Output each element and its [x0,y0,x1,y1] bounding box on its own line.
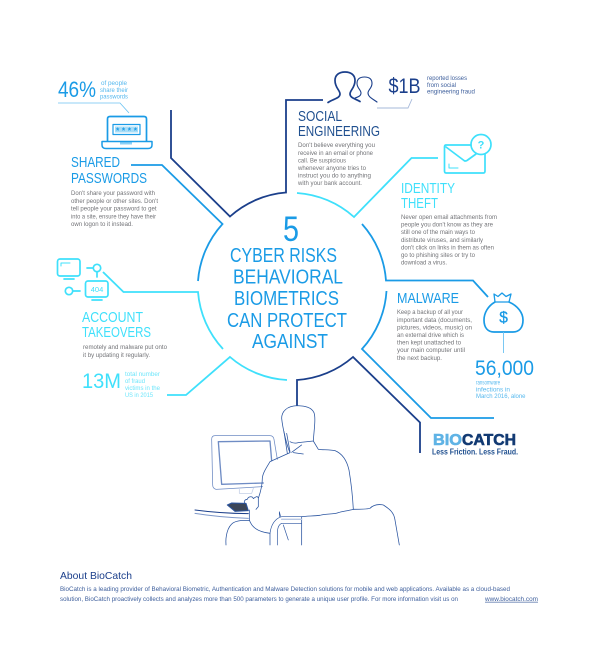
body text: the next backup. [397,355,442,362]
stat: 56,000: March 2016, alone [476,393,526,400]
about text: www.biocatch.com [484,596,538,603]
central title: CYBER RISKS [230,245,337,267]
connector: account takeovers frame [103,272,223,349]
icon: monitors and nodes: 404 [91,285,103,294]
body text: other people or other sites. Don't [71,198,158,205]
heading: about: About BioCatch [60,570,132,582]
logo wordmark: BIO [433,432,462,449]
central title [227,210,347,353]
panel: account takeovers [58,259,167,399]
stat: 46 percent [58,77,129,102]
body text [397,309,472,362]
icon: envelope with question mark: ? [478,140,485,152]
body text: download a virus. [401,260,447,266]
body text: Keep a backup of all your [397,309,464,316]
central title: BIOMETRICS [234,288,339,310]
icon: two people [328,72,377,102]
icon: money bag: $ [499,310,508,326]
heading: malware: MALWARE [397,291,459,307]
heading: account takeovers: ACCOUNT [82,310,143,326]
central title: AGAINST [252,331,328,353]
body text: important data (documents, [397,317,472,324]
central title: BEHAVIORAL [233,266,343,288]
body text: own logon to it instead. [71,221,133,228]
panel: malware [397,291,534,400]
logo: BioCatch [432,432,518,456]
body text: into a site, ensure they have their [71,213,157,220]
about text: BioCatch is a leading provider of Behavioral Biometric, Authentication and Malware Detection solutions for mobile and web applications. Available as a cloud-based [60,586,510,593]
icon: laptop with password: **** [116,126,138,136]
stat: 46 percent: of people [101,80,127,87]
panel: identity theft [401,134,497,266]
logo tagline: Less Friction. Less Fraud. [432,446,518,456]
stat: 13M: victims in the [125,385,160,392]
stat: 1B: engineering fraud [427,88,475,96]
about text [60,586,538,603]
body text: instruct you do to anything [298,172,371,180]
body text [83,344,167,359]
illustration: person at computer [195,406,399,545]
panel: about BioCatch [60,570,538,603]
callout line [377,99,412,108]
stat: 56,000: infections in [476,386,510,394]
connector: malware lower frame [362,291,494,418]
heading: account takeovers: TAKEOVERS [82,325,151,341]
connector: fraud victims frame [167,357,287,395]
stat: 1B: $1B [388,75,420,98]
body text: distribute viruses, and similarly [401,237,484,244]
body text: Don't believe everything you [298,142,375,149]
heading: identity theft: IDENTITY [401,181,455,197]
body text [71,190,158,228]
stat: 13M: 13M [82,370,121,393]
connector: person and logo frame [297,357,420,453]
stat: 13M: US in 2015 [125,392,153,399]
body text: whenever anyone tries to [297,165,366,172]
body text: people you don't know as they are [401,222,493,228]
body text [297,142,375,187]
heading: shared passwords [71,155,147,187]
stat: 13M: of fraud [125,378,145,385]
stat: 46 percent: share their [100,87,129,94]
stat: 1B: from social [427,82,457,89]
heading: shared passwords: PASSWORDS [71,171,147,187]
panel: shared passwords [58,77,158,228]
body text: call. Be suspicious [298,158,347,164]
stat: 13M [82,370,161,399]
body text: remotely and malware put onto [83,344,167,351]
body text [401,214,497,266]
connector: social engineering frame [171,100,323,216]
body text: don't click on links in them as often [401,244,494,251]
about text: solution, BioCatch proactively collects and analyzes more than 500 parameters to generate a unique user profile. For more information visit us on [60,596,458,603]
stat: 46 percent: 46% [58,77,96,102]
stat: 56,000 [475,357,534,400]
stat: 1B: reported losses [427,75,468,82]
heading: social engineering [298,109,380,140]
connector: identity theft frame [297,158,438,217]
stat: 46 percent: passwords [100,94,129,100]
connector: malware upper frame [362,224,488,297]
logo wordmark: CATCH [462,432,516,449]
icon: laptop with password [102,116,152,148]
body text: then kept unattached to [397,340,461,346]
callout line [58,103,129,113]
heading: shared passwords: SHARED [71,155,120,171]
body text: tell people your password to get [71,206,157,213]
body text: an external drive which is [397,332,465,339]
body text: receive in an email or phone [298,150,373,157]
stat: 56,000: 56,000 [475,357,534,380]
central title: 5 [283,210,299,249]
stat: 13M: total number [125,371,161,378]
heading: identity theft: THEFT [401,196,438,212]
body text: it by updating it regularly. [83,352,150,359]
connector: shared passwords frame [131,165,222,281]
body text: with your bank account. [297,180,362,187]
heading: account takeovers [82,310,151,341]
stat: 56,000: ransomware [476,380,500,386]
keyboard [227,503,248,511]
body text: pictures, videos, music) on [397,324,472,332]
central title: CAN PROTECT [227,310,347,332]
body text: your main computer until [397,347,466,354]
callout line [502,332,504,353]
panel: social engineering [297,72,475,187]
heading: social engineering: ENGINEERING [298,124,380,140]
body text: still one of the main ways to [401,229,475,236]
body text: Don't share your password with [71,190,155,197]
stat: 1B [388,75,475,98]
body text: go to phishing sites or try to [401,252,475,259]
heading: identity theft [401,181,455,212]
heading: social engineering: SOCIAL [298,109,342,125]
logo wordmark [433,432,516,449]
body text: Never open email attachments from [401,214,497,221]
